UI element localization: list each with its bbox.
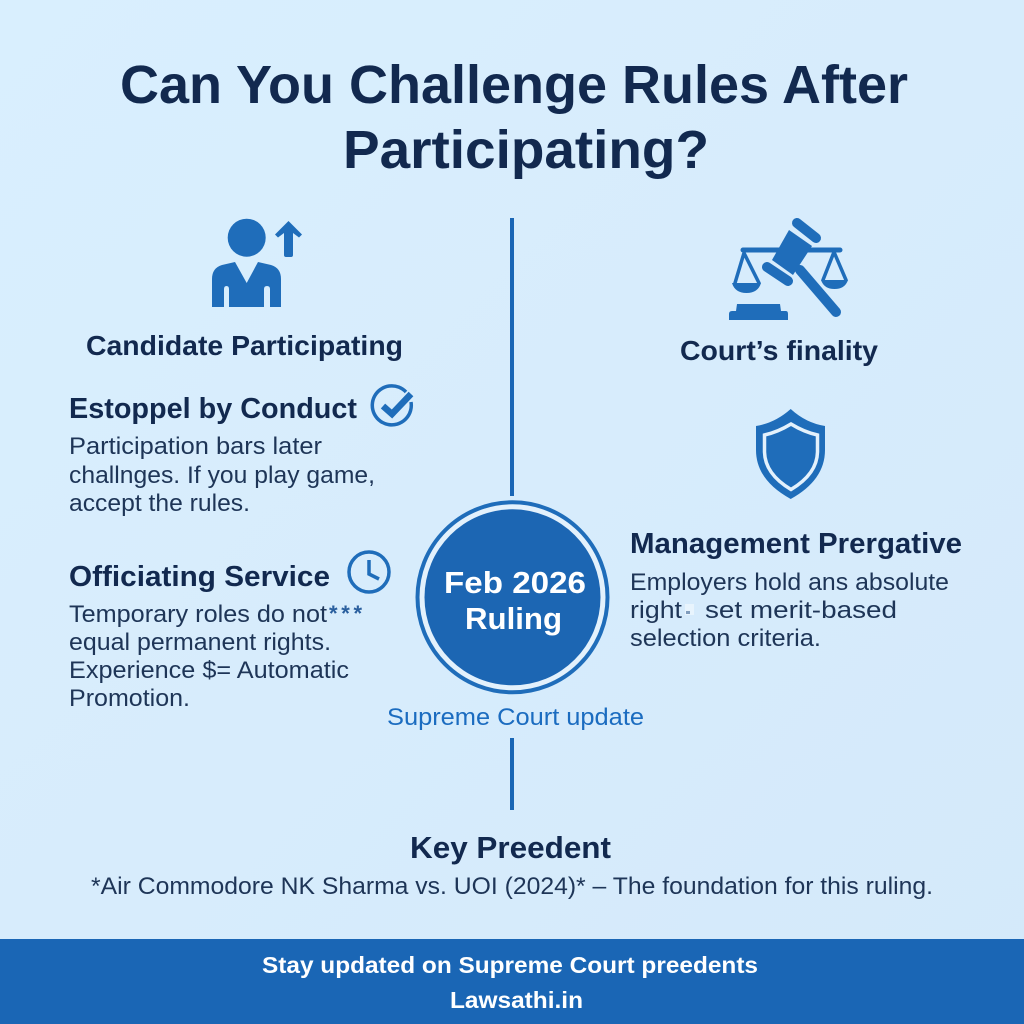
- block: management prerogative: right: [630, 597, 682, 624]
- heading: candidate participating: Candidate Participating: [86, 330, 403, 361]
- heading: court's finality: Court’s finality: [680, 335, 879, 366]
- block: officiating service: Temporary roles do not: [69, 601, 327, 628]
- block: officiating service: Experience $= Automatic: [69, 657, 349, 684]
- central divider upper: [510, 218, 514, 496]
- key precedent: [91, 831, 933, 900]
- panel: candidate side: [69, 219, 411, 712]
- block: estoppel by conduct: Estoppel by Conduct: [69, 393, 357, 425]
- footer banner: [0, 939, 1024, 1024]
- key precedent: *Air Commodore NK Sharma vs. UOI (2024)* – The foundation for this ruling.: [91, 873, 933, 900]
- footer banner: Stay updated on Supreme Court preedents: [262, 952, 758, 978]
- panel: court side: [630, 223, 962, 652]
- block: officiating service: [69, 552, 389, 712]
- icon: shield: [756, 409, 825, 499]
- block: estoppel by conduct: accept the rules.: [69, 490, 250, 517]
- icon: clock: [349, 552, 389, 592]
- title: Can You Challenge Rules After: [120, 55, 908, 115]
- block: estoppel by conduct: challnges. If you play game,: [69, 462, 375, 489]
- badge: Feb 2026 ruling: Ruling: [465, 601, 562, 636]
- block: officiating service: equal permanent rights.: [69, 629, 331, 656]
- title: [120, 55, 908, 180]
- block: management prerogative: [630, 528, 962, 652]
- title: Participating?: [343, 120, 709, 180]
- block: officiating service: Promotion.: [69, 685, 190, 712]
- badge: Feb 2026 ruling: [418, 502, 608, 692]
- block: estoppel by conduct: Participation bars later: [69, 433, 322, 460]
- caption: supreme court update: Supreme Court update: [387, 704, 644, 731]
- icon: person with up arrow: [212, 219, 302, 307]
- block: management prerogative: Management Prergative: [630, 528, 962, 560]
- block: officiating service: ***: [329, 601, 362, 626]
- central divider lower: [510, 738, 514, 810]
- block: officiating service: Officiating Service: [69, 561, 330, 593]
- icon: check circle: [372, 386, 411, 425]
- badge: Feb 2026 ruling: Feb 2026: [444, 565, 586, 600]
- footer banner: Lawsathi.in: [450, 987, 583, 1013]
- icon: gavel and scales: [729, 223, 848, 320]
- block: management prerogative: Employers hold ans absolute: [630, 569, 949, 596]
- block: management prerogative: set merit-based: [705, 597, 897, 624]
- key precedent: Key Preedent: [410, 831, 611, 865]
- block: estoppel by conduct: [69, 386, 411, 517]
- block: management prerogative: selection criteria.: [630, 625, 821, 652]
